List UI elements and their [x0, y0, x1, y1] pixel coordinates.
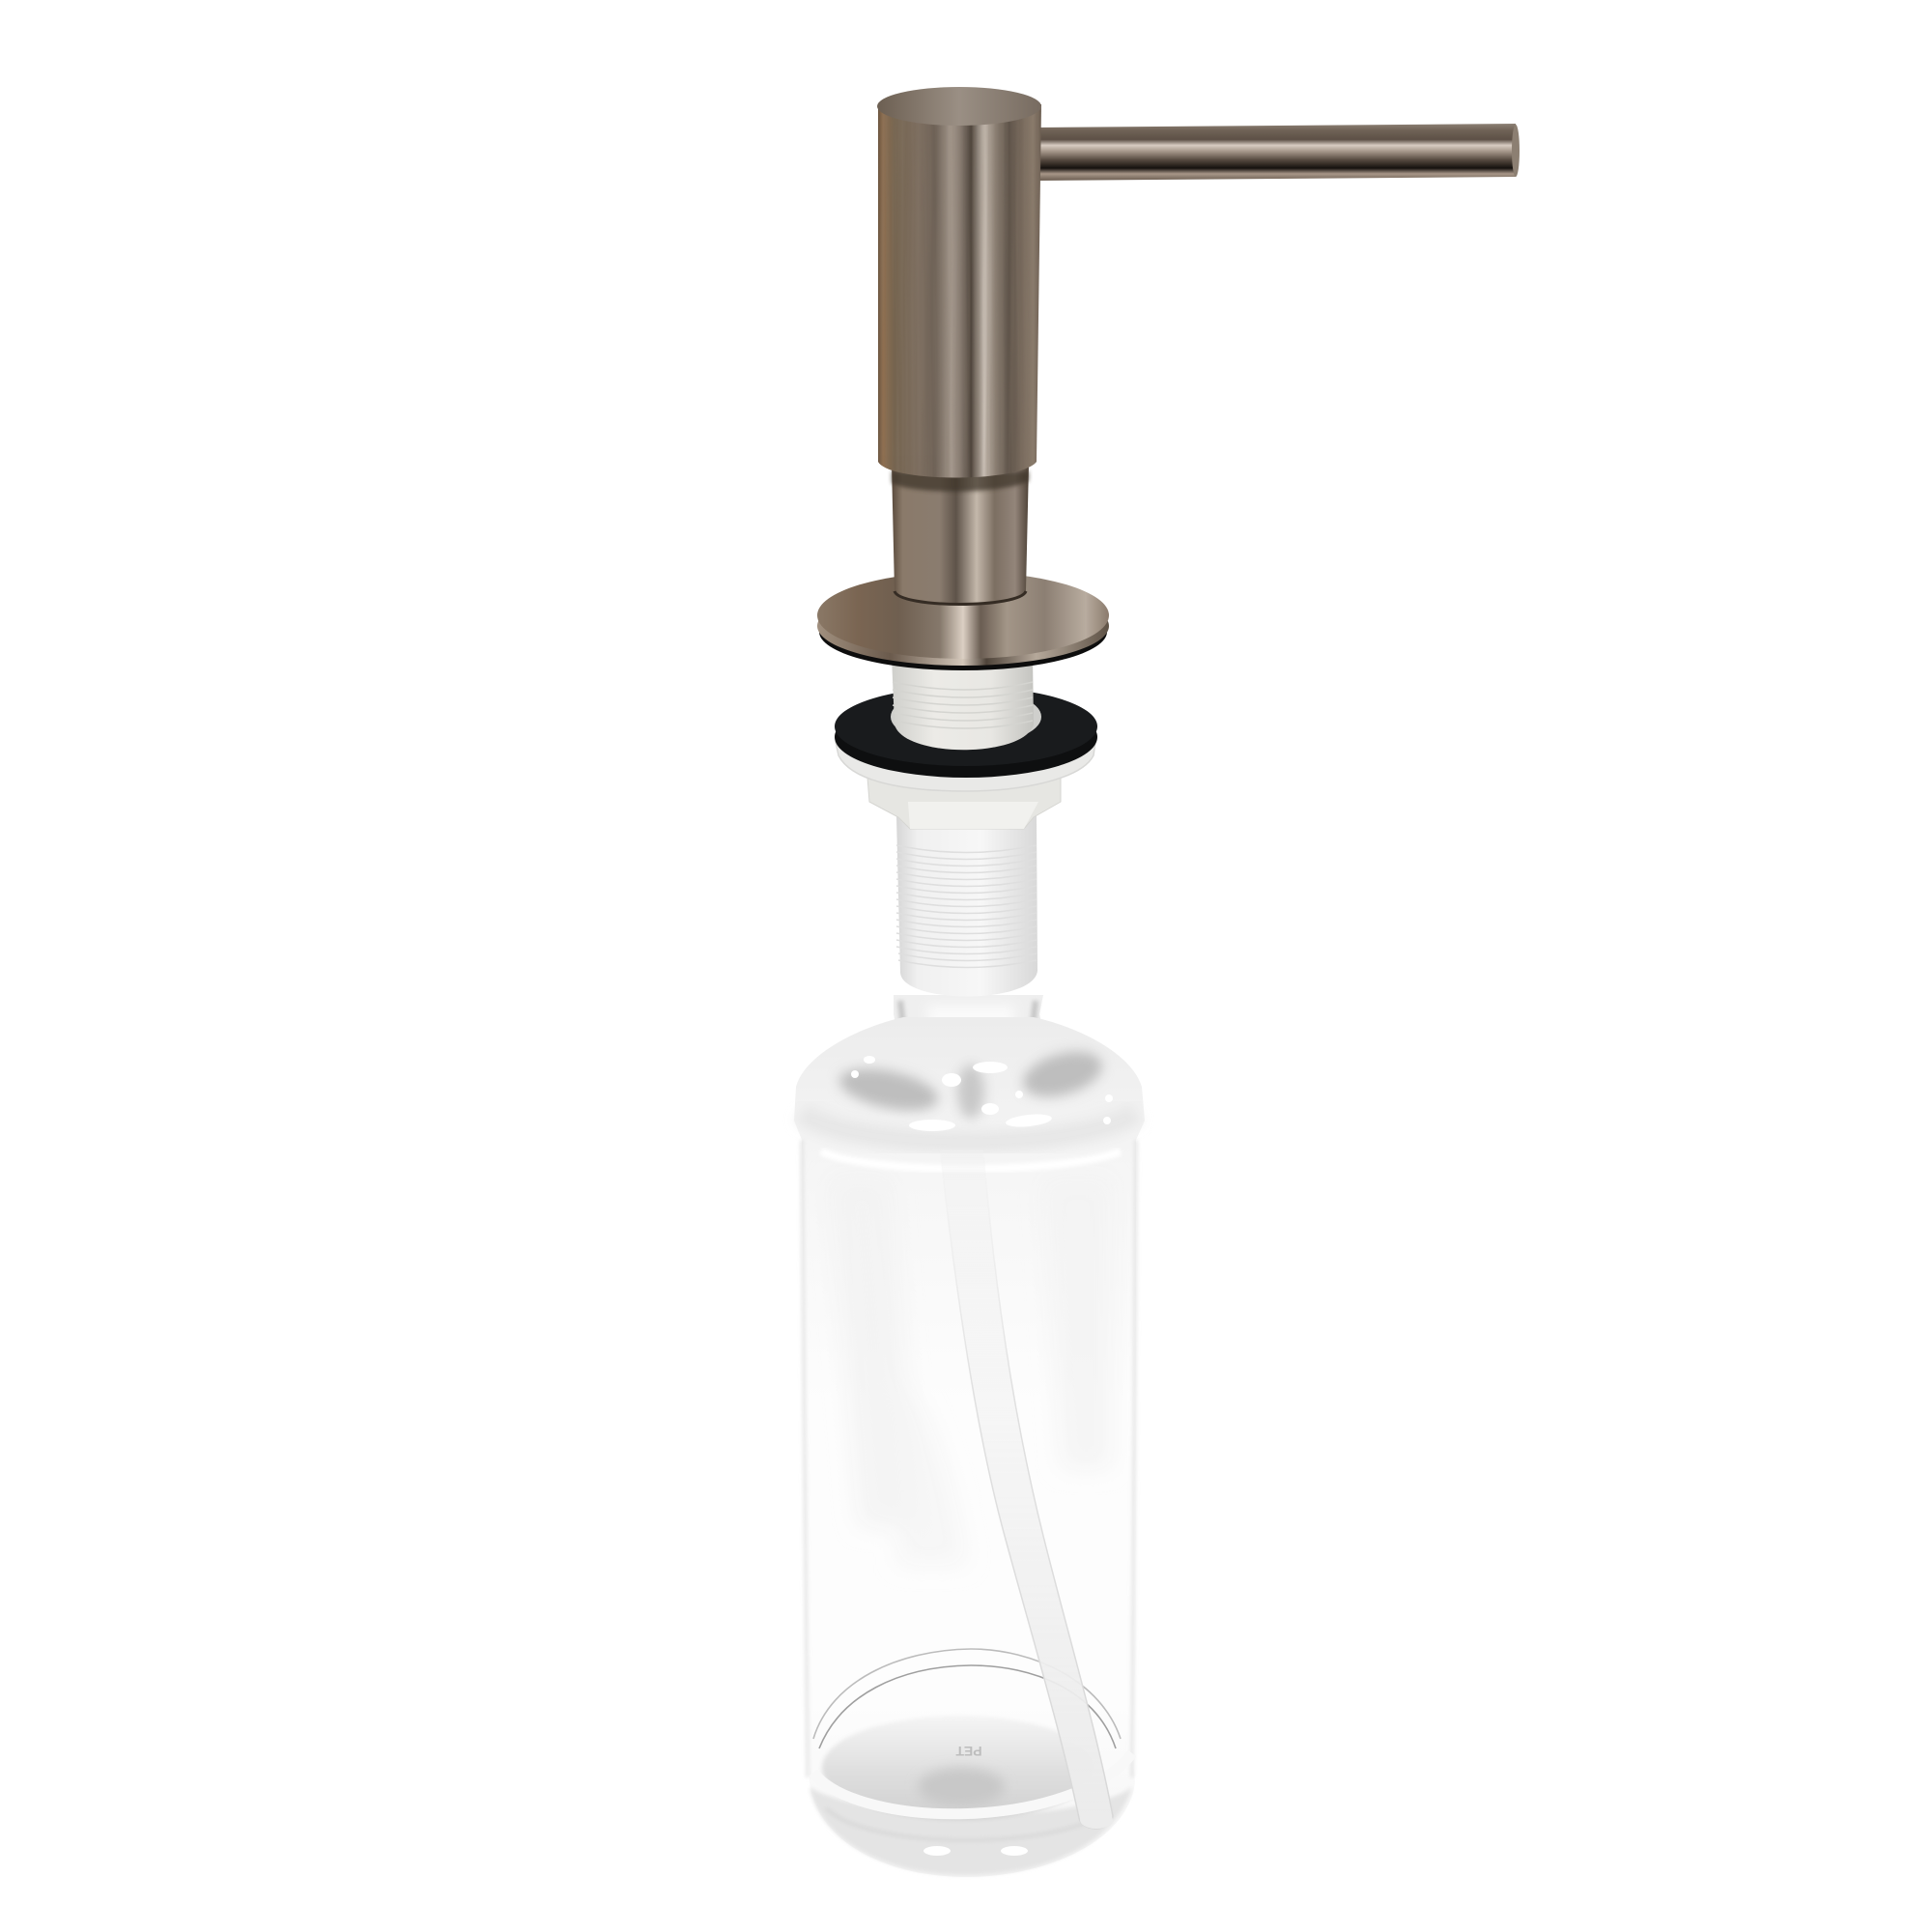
hex nut collar — [867, 778, 1061, 829]
shoulder ring highlights — [802, 1113, 1136, 1169]
bottle side edges — [802, 1140, 1136, 1777]
base flange — [817, 572, 1109, 670]
threaded mounting shank — [835, 657, 1097, 997]
bottle shoulder and cylindrical body — [794, 1017, 1145, 1877]
lower neck — [892, 464, 1029, 605]
bottle neck — [894, 995, 1045, 1072]
bottle inner soft reflections — [831, 1179, 1111, 1565]
shoulder specular highlights — [851, 1056, 1113, 1131]
neck contact shadow — [892, 471, 1029, 492]
base rings and dish — [810, 1649, 1132, 1875]
bottle — [794, 995, 1145, 1877]
neck shadow ring — [895, 591, 1026, 605]
shoulder grey shadows — [836, 1043, 1107, 1119]
product illustration: soap dispenser — [794, 87, 1520, 1877]
brushed nickel pump — [817, 87, 1520, 670]
top cap — [877, 87, 1041, 126]
recycling mark on base: PET — [955, 1744, 982, 1759]
black rubber washer — [835, 687, 1097, 778]
upper threaded shank — [892, 657, 1034, 750]
main cylinder — [878, 104, 1041, 477]
hex nut facet — [908, 802, 1038, 829]
brushed finish on cylinder — [952, 125, 989, 476]
white plastic flange — [836, 742, 1095, 791]
lower threaded shank — [896, 816, 1037, 997]
dip tube — [940, 1150, 1113, 1829]
spout arm — [1036, 124, 1520, 181]
